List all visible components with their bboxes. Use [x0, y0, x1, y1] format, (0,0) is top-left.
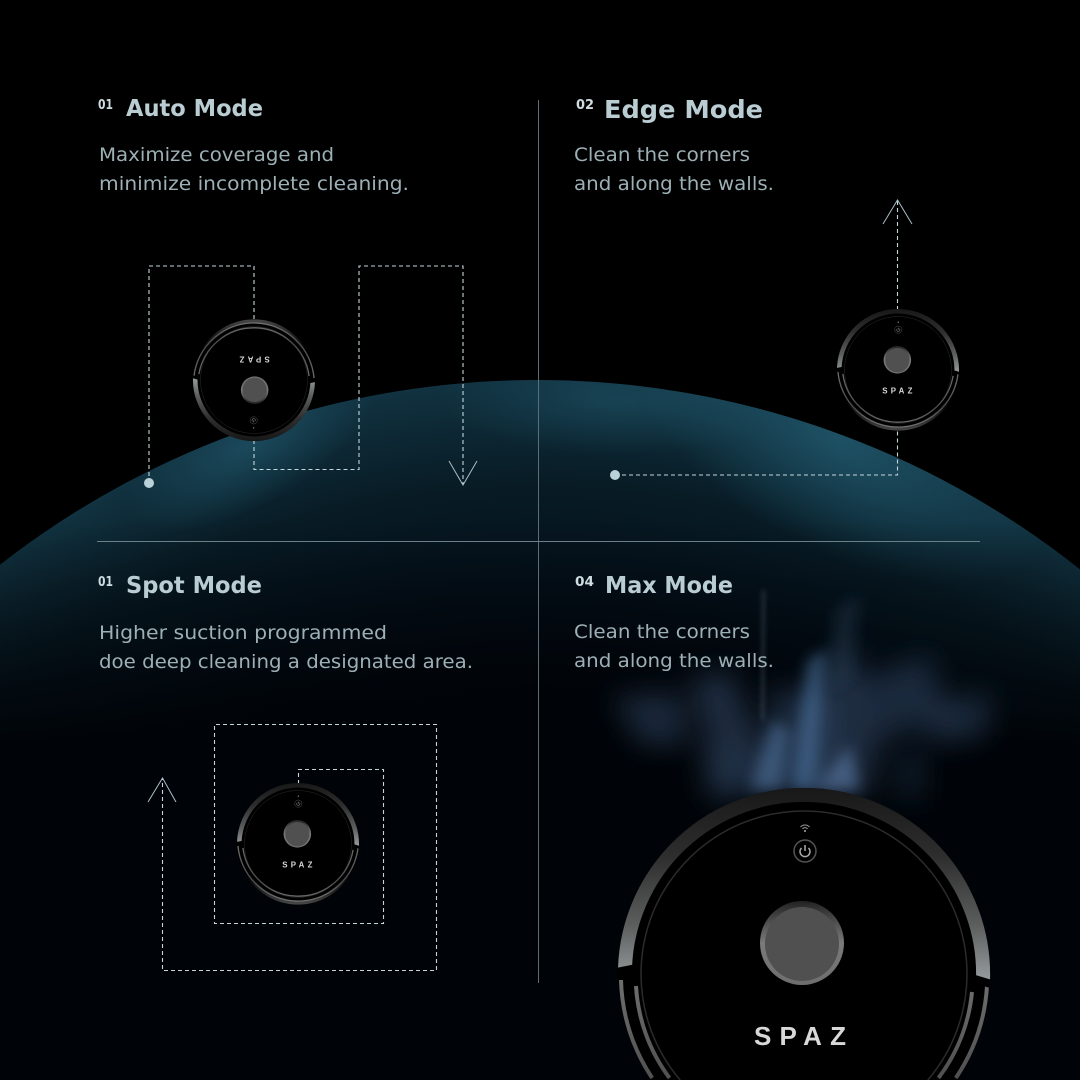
text: max mode description: [574, 621, 774, 672]
arrow: spot mode: [148, 778, 176, 802]
panel: spot mode: [98, 573, 473, 970]
heading: auto mode: 01: [98, 98, 113, 113]
text: spot mode description: Higher suction programmed: [99, 622, 387, 644]
arrow: edge mode: [883, 200, 912, 224]
heading: auto mode: Auto Mode: [126, 96, 263, 122]
path: auto mode route: [144, 266, 463, 488]
heading: spot mode: Spot Mode: [126, 573, 262, 599]
path: edge mode route: [610, 200, 898, 480]
dividers: [97, 100, 980, 983]
heading: edge mode: 02: [576, 98, 594, 113]
heading: max mode: Max Mode: [605, 573, 733, 599]
teal planet glow: [0, 380, 1080, 750]
icon: robot edge: SPAZ: [882, 387, 913, 396]
panel: auto mode: [98, 96, 477, 488]
panel: max mode: [574, 573, 992, 1080]
illustration: blue suction plume: [612, 590, 992, 800]
text: auto mode description: [99, 144, 409, 195]
text: spot mode description: [99, 622, 473, 673]
path: spot mode route: [162, 724, 436, 970]
heading: max mode: 04: [575, 575, 594, 590]
text: auto mode description: minimize incomplete cleaning.: [99, 173, 409, 195]
icon: robot spot: [236, 783, 360, 905]
icon: large robot: [616, 788, 992, 1080]
text: edge mode description: and along the walls.: [574, 173, 774, 195]
icon: robot spot: SPAZ: [282, 861, 313, 870]
text: spot mode description: doe deep cleaning a designated area.: [99, 651, 473, 673]
arrow: auto mode: [449, 461, 477, 485]
icon: robot edge: [836, 309, 960, 431]
heading: spot mode: 01: [98, 575, 113, 590]
icon: robot auto: SPAZ: [239, 354, 270, 363]
text: max mode description: and along the walls.: [574, 650, 774, 672]
icon: robot auto: [192, 319, 316, 441]
text: auto mode description: Maximize coverage and: [99, 144, 334, 166]
text: max mode description: Clean the corners: [574, 621, 750, 643]
text: edge mode description: Clean the corners: [574, 144, 750, 166]
text: edge mode description: [574, 144, 774, 195]
icon: large robot: SPAZ: [754, 1021, 846, 1051]
panel: edge mode: [574, 95, 960, 480]
heading: edge mode: Edge Mode: [604, 95, 763, 124]
